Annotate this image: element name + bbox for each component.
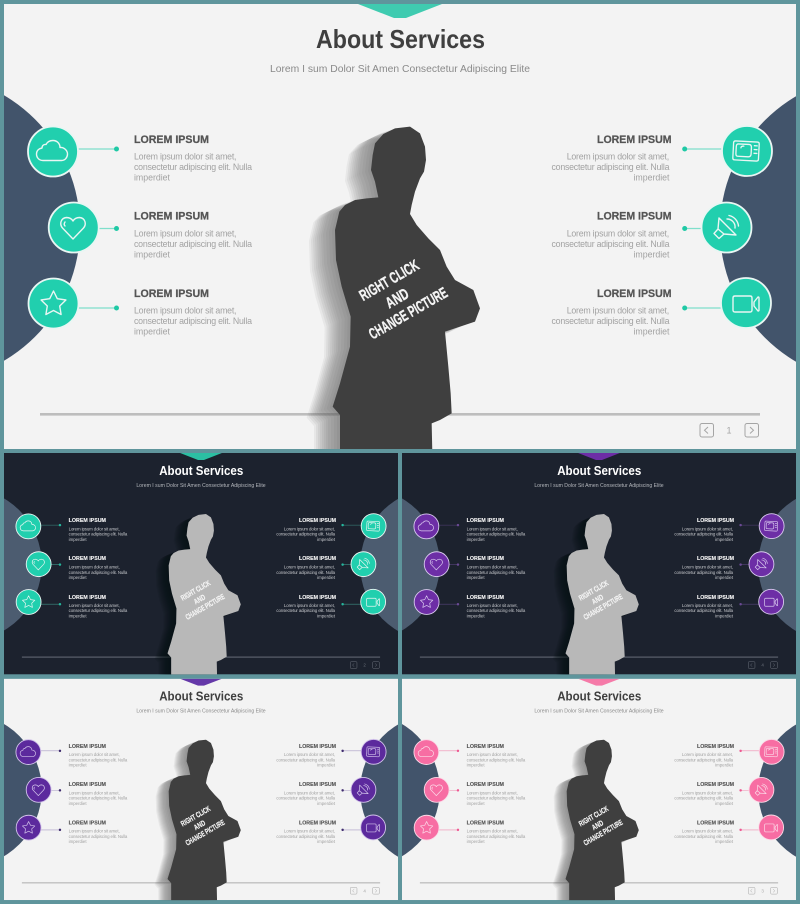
footer rule: [22, 656, 380, 658]
service left 1: [28, 126, 252, 182]
title: About Services: [557, 463, 641, 478]
service right 3: LOREM IPSUM: [697, 820, 734, 826]
service left 2: LOREM IPSUM: [467, 782, 504, 788]
service right 1: Lorem ipsum dolor sit amet,: [284, 526, 335, 531]
left arc: [402, 498, 439, 630]
silhouette with shadow: AND: [590, 592, 605, 606]
service left 1: imperdiet: [467, 537, 485, 542]
service left 1: Lorem ipsum dolor sit amet,: [467, 752, 518, 757]
left navy arc: [4, 95, 78, 361]
subtitle: Lorem I sum Dolor Sit Amen Consectetur Adipiscing Elite: [270, 63, 530, 75]
service left 1: Lorem ipsum dolor sit amet,: [467, 526, 518, 531]
left arc: [4, 498, 41, 630]
service right 3: Lorem ipsum dolor sit amet,: [567, 306, 669, 316]
service left 3: consectetur adipiscing elit. Nulla: [134, 316, 252, 326]
silhouette with shadow: AND: [590, 818, 605, 832]
service left 2: [26, 777, 128, 806]
service left 3: LOREM IPSUM: [69, 595, 106, 601]
service left 3: imperdiet: [69, 613, 87, 618]
service right 3: [674, 589, 784, 618]
service left 1: imperdiet: [134, 172, 171, 182]
footer rule: [40, 413, 760, 416]
service left 3: [16, 590, 128, 618]
service left 3: imperdiet: [69, 839, 87, 844]
silhouette with shadow: RIGHT CLICK: [179, 578, 212, 603]
service right 1: [276, 514, 386, 542]
service left 3: Lorem ipsum dolor sit amet,: [69, 603, 120, 608]
service right 1: LOREM IPSUM: [299, 744, 336, 750]
service left 1: imperdiet: [467, 762, 485, 767]
service right 1: consectetur adipiscing elit. Nulla: [674, 532, 734, 537]
silhouette with shadow: CHANGE PICTURE: [184, 592, 226, 622]
service right 3: [674, 815, 784, 844]
service left 3: consectetur adipiscing elit. Nulla: [467, 608, 526, 613]
left arc: [287, 714, 440, 867]
service left 3: consectetur adipiscing elit. Nulla: [467, 834, 526, 839]
service left 1: Lorem ipsum dolor sit amet,: [69, 526, 120, 531]
service left 1: [16, 514, 128, 542]
silhouette with shadow: CHANGE PICTURE: [184, 818, 226, 847]
service left 1: LOREM IPSUM: [69, 518, 106, 524]
service left 3: LOREM IPSUM: [467, 595, 504, 601]
service right 2: imperdiet: [317, 575, 336, 580]
service right 1: [674, 514, 784, 542]
service right 1: consectetur adipiscing elit. Nulla: [276, 532, 336, 537]
service right 1: Lorem ipsum dolor sit amet,: [682, 526, 733, 531]
pager: 4: [363, 888, 366, 893]
service left 3: consectetur adipiscing elit. Nulla: [69, 834, 128, 839]
pager: [748, 887, 777, 894]
subtitle: Lorem I sum Dolor Sit Amen Consectetur Adipiscing Elite: [534, 709, 664, 715]
service left 3: Lorem ipsum dolor sit amet,: [467, 829, 518, 834]
silhouette with shadow: [307, 127, 480, 464]
service left 2: imperdiet: [134, 250, 171, 260]
service left 3: consectetur adipiscing elit. Nulla: [69, 608, 128, 613]
right arc: [361, 499, 398, 631]
top ribbon: [578, 453, 620, 460]
subtitle: Lorem I sum Dolor Sit Amen Consectetur Adipiscing Elite: [136, 483, 266, 489]
silhouette with shadow: RIGHT CLICK: [357, 257, 423, 305]
service right 3: LOREM IPSUM: [697, 595, 734, 601]
silhouette with shadow: [553, 514, 639, 682]
silhouette with shadow: [155, 514, 241, 682]
top ribbon: [578, 679, 620, 686]
panel: small dark teal slide: [4, 453, 398, 674]
service right 3: consectetur adipiscing elit. Nulla: [276, 608, 336, 613]
footer rule: [22, 882, 380, 883]
service left 3: LOREM IPSUM: [69, 820, 106, 826]
service left 3: imperdiet: [467, 613, 485, 618]
service left 3: LOREM IPSUM: [134, 288, 209, 300]
service left 1: [16, 740, 128, 767]
service right 3: Lorem ipsum dolor sit amet,: [284, 829, 335, 834]
service left 2: imperdiet: [467, 801, 485, 806]
footer rule: [420, 656, 778, 658]
service right 3: Lorem ipsum dolor sit amet,: [682, 829, 733, 834]
service right 1: Lorem ipsum dolor sit amet,: [567, 152, 669, 162]
service left 3: [16, 815, 128, 844]
service left 2: consectetur adipiscing elit. Nulla: [134, 239, 252, 249]
panel: small dark purple slide: [402, 453, 796, 674]
service right 3: imperdiet: [715, 613, 734, 618]
service left 2: LOREM IPSUM: [467, 556, 504, 562]
service right 2: imperdiet: [317, 801, 336, 806]
panel: large light teal slide: [0, 4, 800, 464]
service right 3: LOREM IPSUM: [299, 595, 336, 601]
service left 1: LOREM IPSUM: [467, 518, 504, 524]
service left 2: consectetur adipiscing elit. Nulla: [467, 796, 526, 801]
service left 1: consectetur adipiscing elit. Nulla: [467, 532, 526, 537]
footer rule: [420, 882, 778, 883]
panel: small light pink slide: [287, 679, 800, 904]
right navy arc: [722, 96, 796, 362]
pager: [350, 887, 379, 894]
service left 2: LOREM IPSUM: [69, 556, 106, 562]
service right 1: LOREM IPSUM: [299, 518, 336, 524]
service left 2: [424, 552, 526, 580]
silhouette with shadow: RIGHT CLICK: [577, 804, 610, 828]
service right 1: [276, 739, 386, 767]
top ribbon: [180, 453, 222, 460]
service right 2: LOREM IPSUM: [697, 556, 734, 562]
top ribbon: [358, 4, 442, 18]
service right 1: consectetur adipiscing elit. Nulla: [552, 162, 670, 172]
service left 2: imperdiet: [69, 801, 87, 806]
service left 2: Lorem ipsum dolor sit amet,: [134, 228, 236, 238]
service right 2: Lorem ipsum dolor sit amet,: [284, 565, 335, 570]
silhouette with shadow: CHANGE PICTURE: [582, 592, 624, 622]
service right 3: Lorem ipsum dolor sit amet,: [284, 603, 335, 608]
service left 3: [414, 590, 526, 618]
service left 3: LOREM IPSUM: [467, 820, 504, 826]
service right 1: Lorem ipsum dolor sit amet,: [284, 752, 335, 757]
service left 1: imperdiet: [69, 762, 87, 767]
subtitle: Lorem I sum Dolor Sit Amen Consectetur Adipiscing Elite: [136, 709, 266, 715]
pager: 1: [726, 426, 732, 436]
service right 1: Lorem ipsum dolor sit amet,: [682, 752, 733, 757]
service right 1: [552, 126, 772, 182]
service right 1: imperdiet: [634, 172, 670, 182]
service left 2: Lorem ipsum dolor sit amet,: [69, 790, 120, 795]
title: About Services: [159, 463, 243, 478]
service right 3: Lorem ipsum dolor sit amet,: [682, 603, 733, 608]
service left 2: consectetur adipiscing elit. Nulla: [467, 570, 526, 575]
service right 1: imperdiet: [715, 537, 734, 542]
subtitle: Lorem I sum Dolor Sit Amen Consectetur Adipiscing Elite: [534, 483, 664, 489]
service right 1: imperdiet: [317, 537, 336, 542]
service right 3: imperdiet: [317, 613, 336, 618]
silhouette with shadow: CHANGE PICTURE: [582, 818, 624, 847]
title: About Services: [159, 689, 243, 704]
service right 2: LOREM IPSUM: [597, 210, 672, 222]
service right 2: imperdiet: [715, 575, 734, 580]
service left 1: imperdiet: [69, 537, 87, 542]
service right 3: [276, 589, 386, 618]
service right 2: LOREM IPSUM: [697, 782, 734, 788]
service right 2: consectetur adipiscing elit. Nulla: [674, 570, 734, 575]
right arc: [759, 499, 796, 631]
top ribbon: [180, 679, 222, 686]
service right 1: [674, 739, 784, 767]
service right 3: consectetur adipiscing elit. Nulla: [674, 608, 734, 613]
service right 2: Lorem ipsum dolor sit amet,: [567, 228, 669, 238]
silhouette with shadow: [553, 740, 639, 904]
service left 2: [424, 777, 526, 806]
silhouette with shadow: AND: [192, 592, 207, 606]
service left 1: LOREM IPSUM: [134, 134, 209, 146]
title: About Services: [316, 24, 485, 54]
service right 2: LOREM IPSUM: [299, 556, 336, 562]
service right 3: [552, 278, 771, 336]
service right 3: LOREM IPSUM: [299, 820, 336, 826]
right arc: [758, 714, 800, 867]
service right 3: consectetur adipiscing elit. Nulla: [674, 834, 734, 839]
service right 2: [552, 202, 752, 260]
pager: 2: [363, 663, 366, 668]
service left 1: consectetur adipiscing elit. Nulla: [467, 757, 526, 762]
service left 2: LOREM IPSUM: [69, 782, 106, 788]
service left 2: Lorem ipsum dolor sit amet,: [69, 565, 120, 570]
service right 2: consectetur adipiscing elit. Nulla: [276, 796, 336, 801]
service right 2: Lorem ipsum dolor sit amet,: [284, 790, 335, 795]
service right 2: imperdiet: [634, 250, 670, 260]
service left 3: imperdiet: [134, 326, 171, 336]
service left 2: [49, 202, 252, 260]
service right 2: [276, 552, 376, 580]
service right 3: consectetur adipiscing elit. Nulla: [276, 834, 336, 839]
service left 2: Lorem ipsum dolor sit amet,: [467, 565, 518, 570]
service right 2: consectetur adipiscing elit. Nulla: [674, 796, 734, 801]
service right 1: LOREM IPSUM: [697, 518, 734, 524]
panel: small light purple slide: [0, 679, 513, 904]
pager: 4: [761, 663, 764, 668]
service left 2: LOREM IPSUM: [134, 210, 209, 222]
service left 1: consectetur adipiscing elit. Nulla: [134, 162, 252, 172]
service left 3: imperdiet: [467, 839, 485, 844]
service left 3: Lorem ipsum dolor sit amet,: [134, 306, 236, 316]
service right 3: imperdiet: [634, 326, 670, 336]
right arc: [360, 714, 513, 867]
service right 1: consectetur adipiscing elit. Nulla: [674, 757, 734, 762]
silhouette with shadow: [155, 740, 241, 904]
pager: [748, 662, 777, 668]
service left 1: consectetur adipiscing elit. Nulla: [69, 532, 128, 537]
service right 2: LOREM IPSUM: [299, 782, 336, 788]
service right 2: [674, 777, 774, 806]
service right 3: consectetur adipiscing elit. Nulla: [552, 316, 670, 326]
service left 1: [414, 740, 526, 767]
service left 1: Lorem ipsum dolor sit amet,: [134, 152, 236, 162]
service right 2: imperdiet: [715, 801, 734, 806]
service left 1: Lorem ipsum dolor sit amet,: [69, 752, 120, 757]
pager: [350, 662, 379, 668]
service left 3: [28, 278, 252, 336]
service right 2: [276, 777, 376, 806]
service left 2: [26, 552, 128, 580]
silhouette with shadow: RIGHT CLICK: [179, 804, 212, 828]
silhouette with shadow: AND: [383, 286, 412, 312]
service left 1: LOREM IPSUM: [467, 744, 504, 750]
service left 3: Lorem ipsum dolor sit amet,: [467, 603, 518, 608]
service left 1: LOREM IPSUM: [69, 744, 106, 750]
title: About Services: [557, 689, 641, 704]
service left 1: consectetur adipiscing elit. Nulla: [69, 757, 128, 762]
service right 2: consectetur adipiscing elit. Nulla: [552, 239, 670, 249]
service left 2: consectetur adipiscing elit. Nulla: [69, 570, 128, 575]
service right 1: imperdiet: [715, 762, 734, 767]
service right 2: consectetur adipiscing elit. Nulla: [276, 570, 336, 575]
service right 2: Lorem ipsum dolor sit amet,: [682, 565, 733, 570]
service right 1: consectetur adipiscing elit. Nulla: [276, 757, 336, 762]
service right 1: LOREM IPSUM: [597, 134, 672, 146]
service left 2: Lorem ipsum dolor sit amet,: [467, 790, 518, 795]
service left 3: Lorem ipsum dolor sit amet,: [69, 829, 120, 834]
service left 2: imperdiet: [467, 575, 485, 580]
service right 3: imperdiet: [317, 839, 336, 844]
silhouette with shadow: AND: [192, 818, 207, 832]
service right 1: imperdiet: [317, 762, 336, 767]
service right 3: imperdiet: [715, 839, 734, 844]
silhouette with shadow: CHANGE PICTURE: [366, 285, 451, 343]
service left 2: imperdiet: [69, 575, 87, 580]
service right 2: Lorem ipsum dolor sit amet,: [682, 790, 733, 795]
service right 3: LOREM IPSUM: [597, 288, 672, 300]
left arc: [0, 714, 42, 867]
service left 2: consectetur adipiscing elit. Nulla: [69, 796, 128, 801]
pager: [700, 424, 758, 437]
silhouette with shadow: RIGHT CLICK: [577, 578, 610, 603]
service left 3: [414, 815, 526, 844]
service right 1: LOREM IPSUM: [697, 744, 734, 750]
service left 1: [414, 514, 526, 542]
pager: 3: [761, 888, 764, 893]
service right 2: [674, 552, 774, 580]
service right 3: [276, 815, 386, 844]
